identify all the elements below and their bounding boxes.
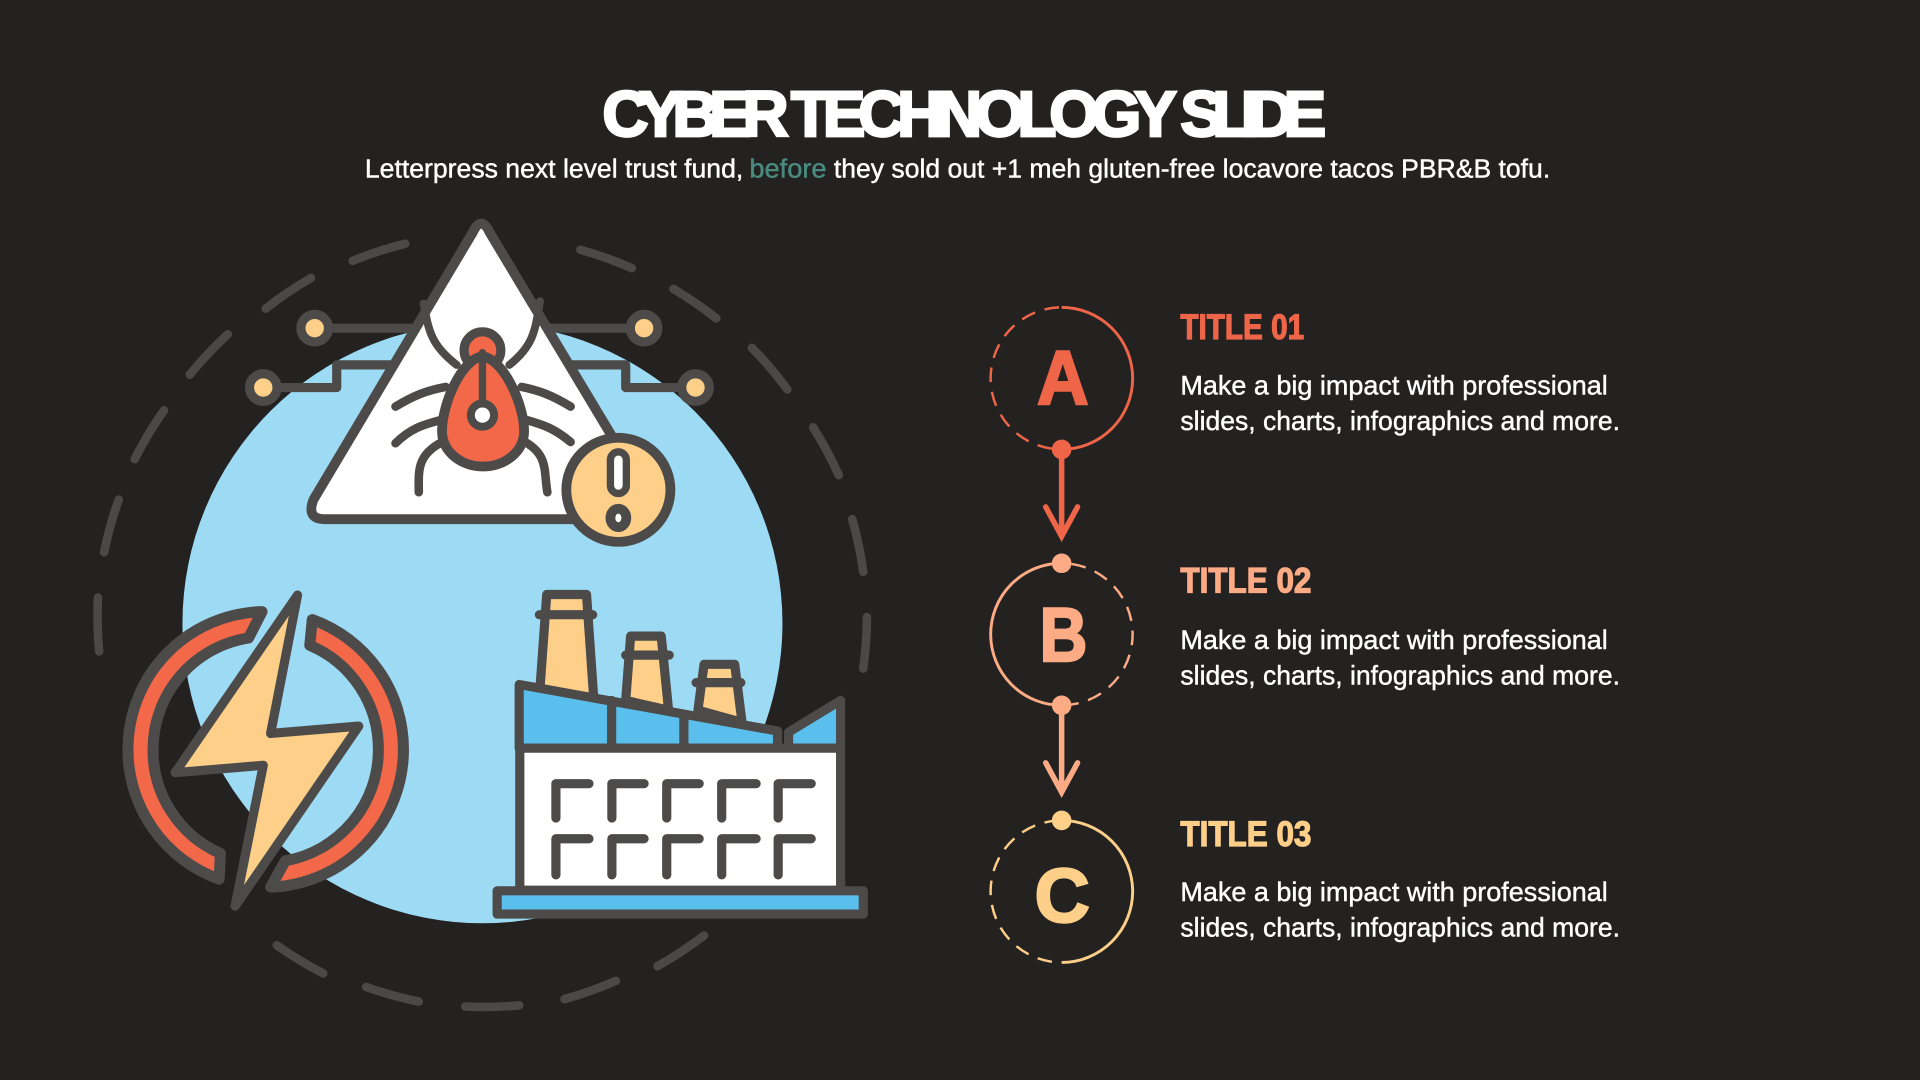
illustration: cyber threat	[98, 223, 867, 1007]
subtitle: Letterpress next level trust fund,	[365, 156, 743, 184]
bug legs	[396, 387, 571, 492]
text 03: slides, charts, infographics and more.	[1180, 913, 1620, 943]
text 02: Make a big impact with professional	[1180, 625, 1608, 655]
letter B: B	[1040, 593, 1087, 678]
light blue background circle	[182, 323, 782, 923]
text 03: Make a big impact with professional	[1180, 877, 1608, 907]
circle B	[991, 553, 1133, 715]
heading 02: TITLE 02	[1180, 561, 1311, 601]
text 01	[1180, 370, 1620, 436]
subtitle: they sold out +1 meh gluten-free locavore tacos PBR&B tofu.	[834, 156, 1550, 184]
factory base	[497, 891, 863, 914]
heading 03: TITLE 03	[1180, 814, 1311, 854]
arrow A to B	[1046, 453, 1078, 536]
title: TECHNOLOGY	[791, 79, 1177, 150]
step A	[991, 307, 1620, 536]
bug antennae	[424, 301, 540, 365]
icon: warning triangle with bug	[311, 223, 618, 519]
text 01: slides, charts, infographics and more.	[1180, 406, 1620, 436]
chimneys	[539, 594, 742, 722]
ring segment left	[128, 612, 262, 879]
heading 01: TITLE 01	[1180, 307, 1304, 347]
title: CYBER	[602, 79, 789, 150]
title	[602, 79, 1326, 150]
factory building	[520, 748, 841, 890]
dashed ring	[98, 244, 867, 1007]
icon: circuit lines	[249, 314, 709, 401]
lightning bolt	[175, 595, 359, 906]
icon: lightning power ring	[128, 595, 403, 906]
ring segment right	[271, 620, 403, 887]
text 02: slides, charts, infographics and more.	[1180, 660, 1620, 690]
factory roof	[519, 684, 778, 748]
icon: exclamation badge	[566, 438, 670, 542]
factory windows	[556, 784, 811, 875]
title: SLIDE	[1180, 79, 1326, 150]
subtitle: before	[749, 156, 827, 184]
timeline	[991, 307, 1620, 962]
text 03	[1180, 877, 1620, 943]
text 02	[1180, 625, 1620, 690]
circle C	[991, 811, 1133, 962]
subtitle	[365, 156, 1550, 184]
step C	[991, 811, 1620, 962]
warning triangle	[311, 223, 618, 519]
arrow B to C	[1046, 709, 1078, 792]
text 01: Make a big impact with professional	[1180, 370, 1608, 400]
circle A	[991, 307, 1133, 459]
bug head	[464, 332, 501, 369]
letter A: A	[1037, 336, 1089, 421]
step B	[991, 553, 1620, 792]
icon: factory	[497, 594, 863, 914]
letter C: C	[1035, 854, 1090, 939]
bug body	[442, 356, 524, 467]
